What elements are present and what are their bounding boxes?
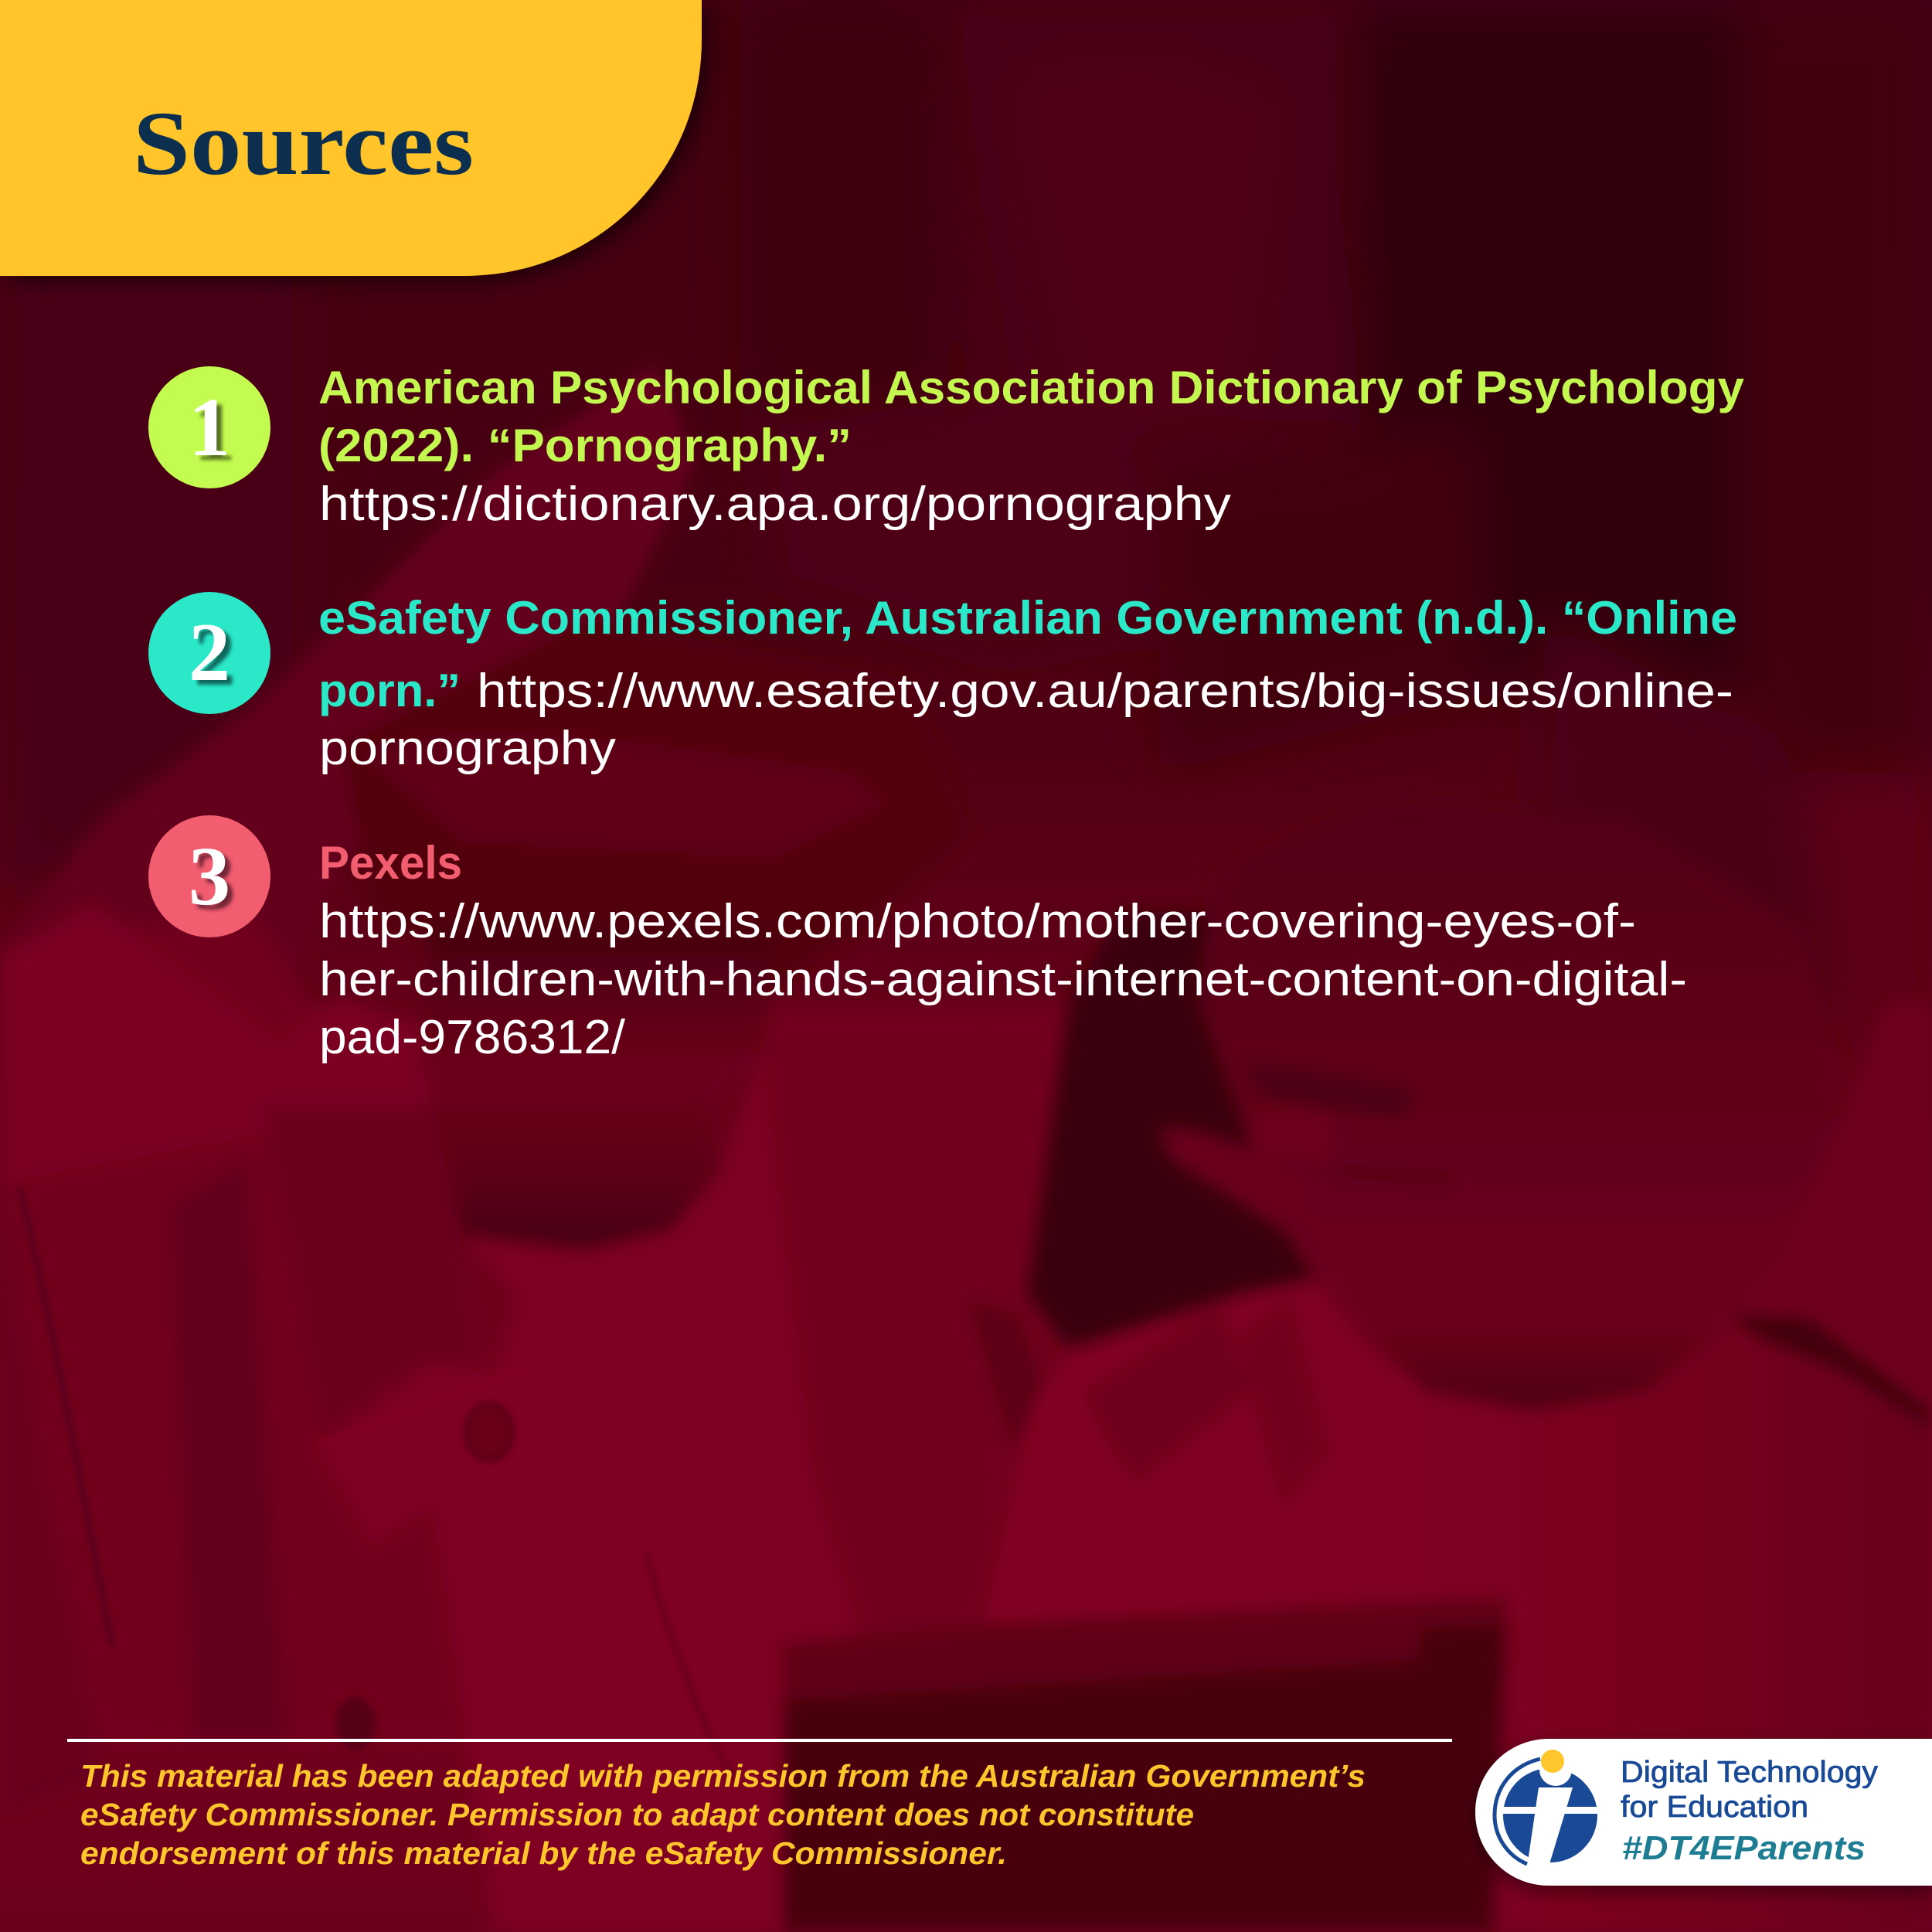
footer disclaimer xyxy=(80,1758,1366,1871)
source 3 text: her-children-with-hands-against-internet-content-on-digital- xyxy=(319,953,1687,1006)
right child's shirt xyxy=(985,1281,1932,1932)
logo panel xyxy=(1475,1739,1932,1886)
source 2 text xyxy=(318,592,1737,775)
source 2 text: eSafety Commissioner, Australian Government (n.d.). “Online xyxy=(318,592,1737,644)
left child's neck xyxy=(419,927,773,1251)
mother's torso shadow xyxy=(1025,912,1317,1351)
source 3 text: https://www.pexels.com/photo/mother-covering-eyes-of- xyxy=(319,895,1636,948)
logo text: Digital Technology xyxy=(1621,1756,1879,1789)
source 2 text: porn.” xyxy=(318,665,461,716)
source 3 text: Pexels xyxy=(319,837,462,889)
arm diagonal xyxy=(0,363,696,1159)
logo text xyxy=(1621,1756,1879,1867)
left child's t-shirt xyxy=(317,1051,951,1932)
footer disclaimer: eSafety Commissioner. Permission to adapt content does not constitute xyxy=(80,1797,1194,1832)
tablet xyxy=(782,1597,1507,1932)
logo text: for Education xyxy=(1621,1791,1808,1824)
source 1 text xyxy=(318,362,1745,531)
source 1 badge xyxy=(148,366,270,488)
source 3 badge: 3 xyxy=(189,831,230,923)
source 2 badge xyxy=(148,592,270,714)
footer disclaimer: endorsement of this material by the eSafety Commissioner. xyxy=(80,1835,1007,1871)
source 2 text: https://www.esafety.gov.au/parents/big-issues/online- xyxy=(477,665,1733,718)
source 2 badge: 2 xyxy=(189,607,230,699)
heading tab xyxy=(0,0,702,276)
source 2 text: pornography xyxy=(319,722,616,775)
source 3 badge xyxy=(148,815,270,937)
logo text: #DT4EParents xyxy=(1622,1829,1866,1867)
source 1 text: (2022). “Pornography.” xyxy=(318,420,852,471)
source 1 text: https://dictionary.apa.org/pornography xyxy=(319,478,1231,531)
source 3 text xyxy=(319,837,1687,1064)
heading: Sources: Sources xyxy=(133,93,474,194)
right child's face xyxy=(1200,796,1847,1412)
footer disclaimer: This material has been adapted with permission from the Australian Government’s xyxy=(80,1758,1366,1794)
source 1 badge: 1 xyxy=(189,382,230,474)
icon: Digital Technology for Education logo xyxy=(1495,1750,1601,1867)
right child's sleeve xyxy=(1723,1005,1932,1414)
source 1 text: American Psychological Association Dictionary of Psychology xyxy=(318,362,1745,413)
source 3 text: pad-9786312/ xyxy=(319,1011,626,1064)
